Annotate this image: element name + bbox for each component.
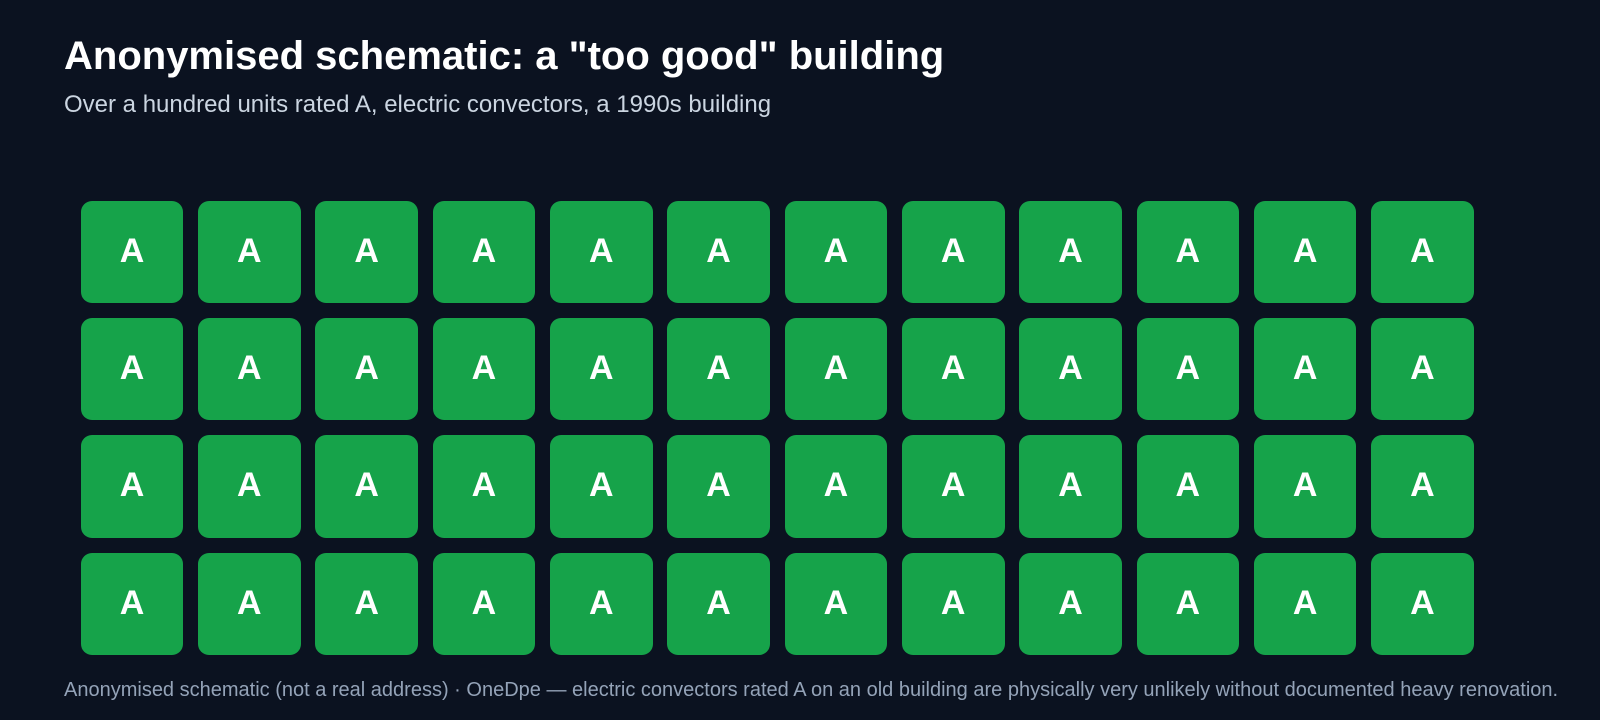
row 2 of A-rated units: A bbox=[120, 349, 144, 387]
row 2 of A-rated units: A bbox=[941, 349, 965, 387]
row 4 of A-rated units: A bbox=[237, 584, 262, 622]
row 4 of A-rated units bbox=[81, 553, 1474, 655]
row 1 of A-rated units: A bbox=[1293, 232, 1317, 270]
row 1 of A-rated units: A bbox=[120, 232, 144, 270]
row 4 of A-rated units: A bbox=[589, 584, 614, 622]
row 3 of A-rated units: A bbox=[354, 466, 379, 504]
row 3 of A-rated units: A bbox=[824, 466, 848, 504]
row 2 of A-rated units: A bbox=[589, 349, 614, 387]
row 1 of A-rated units: A bbox=[1410, 232, 1435, 270]
grid of units rated A bbox=[81, 201, 1474, 655]
row 3 of A-rated units: A bbox=[941, 466, 965, 504]
row 1 of A-rated units: A bbox=[354, 232, 379, 270]
row 1 of A-rated units: A bbox=[706, 232, 731, 270]
row 4 of A-rated units: A bbox=[1058, 584, 1083, 622]
row 4 of A-rated units: A bbox=[1410, 584, 1435, 622]
row 2 of A-rated units: A bbox=[824, 349, 848, 387]
row 4 of A-rated units: A bbox=[120, 584, 144, 622]
row 1 of A-rated units bbox=[81, 201, 1474, 303]
footnote: Anonymised schematic (not a real address) · OneDpe — electric convectors rated A on an old building are physically very unlikely without documented heavy renovation. bbox=[64, 679, 1558, 701]
row 1 of A-rated units: A bbox=[1058, 232, 1083, 270]
title: Anonymised schematic: a "too good" building bbox=[64, 34, 944, 78]
row 2 of A-rated units: A bbox=[1176, 349, 1200, 387]
row 2 of A-rated units: A bbox=[237, 349, 262, 387]
row 2 of A-rated units: A bbox=[354, 349, 379, 387]
row 3 of A-rated units: A bbox=[1058, 466, 1083, 504]
subtitle: Over a hundred units rated A, electric convectors, a 1990s building bbox=[64, 91, 771, 118]
row 3 of A-rated units: A bbox=[237, 466, 262, 504]
row 3 of A-rated units: A bbox=[1410, 466, 1435, 504]
row 3 of A-rated units: A bbox=[706, 466, 731, 504]
row 2 of A-rated units: A bbox=[472, 349, 496, 387]
row 2 of A-rated units: A bbox=[1410, 349, 1435, 387]
row 4 of A-rated units: A bbox=[706, 584, 731, 622]
row 3 of A-rated units: A bbox=[1176, 466, 1200, 504]
row 4 of A-rated units: A bbox=[1293, 584, 1317, 622]
row 2 of A-rated units: A bbox=[1058, 349, 1083, 387]
row 4 of A-rated units: A bbox=[354, 584, 379, 622]
row 2 of A-rated units bbox=[81, 318, 1474, 420]
row 1 of A-rated units: A bbox=[472, 232, 496, 270]
row 3 of A-rated units: A bbox=[120, 466, 144, 504]
row 1 of A-rated units: A bbox=[1176, 232, 1200, 270]
row 4 of A-rated units: A bbox=[1176, 584, 1200, 622]
row 2 of A-rated units: A bbox=[706, 349, 731, 387]
row 1 of A-rated units: A bbox=[824, 232, 848, 270]
row 4 of A-rated units: A bbox=[824, 584, 848, 622]
row 3 of A-rated units: A bbox=[1293, 466, 1317, 504]
row 3 of A-rated units: A bbox=[472, 466, 496, 504]
row 1 of A-rated units: A bbox=[589, 232, 614, 270]
row 3 of A-rated units: A bbox=[589, 466, 614, 504]
row 4 of A-rated units: A bbox=[941, 584, 965, 622]
row 2 of A-rated units: A bbox=[1293, 349, 1317, 387]
row 1 of A-rated units: A bbox=[941, 232, 965, 270]
row 1 of A-rated units: A bbox=[237, 232, 262, 270]
row 4 of A-rated units: A bbox=[472, 584, 496, 622]
row 3 of A-rated units bbox=[81, 435, 1474, 538]
